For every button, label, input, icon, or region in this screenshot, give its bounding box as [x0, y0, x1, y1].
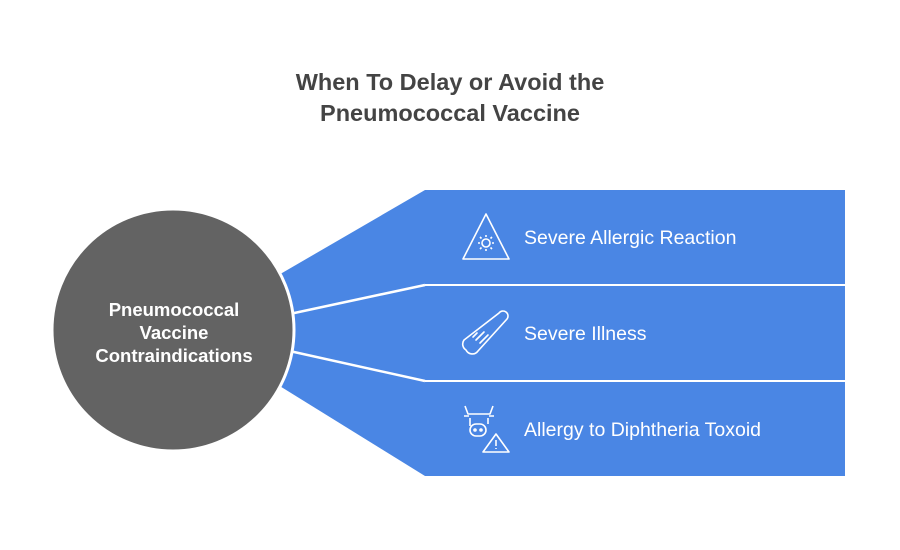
- panel: blue bands: [270, 190, 845, 476]
- text: Severe Illness: Severe Illness: [524, 323, 647, 345]
- circle: center: Pneumococcal: [109, 299, 239, 320]
- title: When To Delay or Avoid the: [296, 69, 604, 95]
- icon: warning triangle with sun: [463, 214, 509, 259]
- title: [296, 69, 604, 126]
- circle: center: Vaccine: [140, 322, 208, 343]
- circle: center: [52, 209, 294, 451]
- icon: cow with warning: [464, 406, 509, 452]
- circle: center: Contraindications: [95, 345, 253, 366]
- title: Pneumococcal Vaccine: [320, 100, 580, 126]
- text: Allergy to Diphtheria Toxoid: Allergy to Diphtheria Toxoid: [524, 419, 761, 441]
- text: Severe Allergic Reaction: Severe Allergic Reaction: [524, 227, 736, 249]
- icon: thermometer: [463, 311, 508, 354]
